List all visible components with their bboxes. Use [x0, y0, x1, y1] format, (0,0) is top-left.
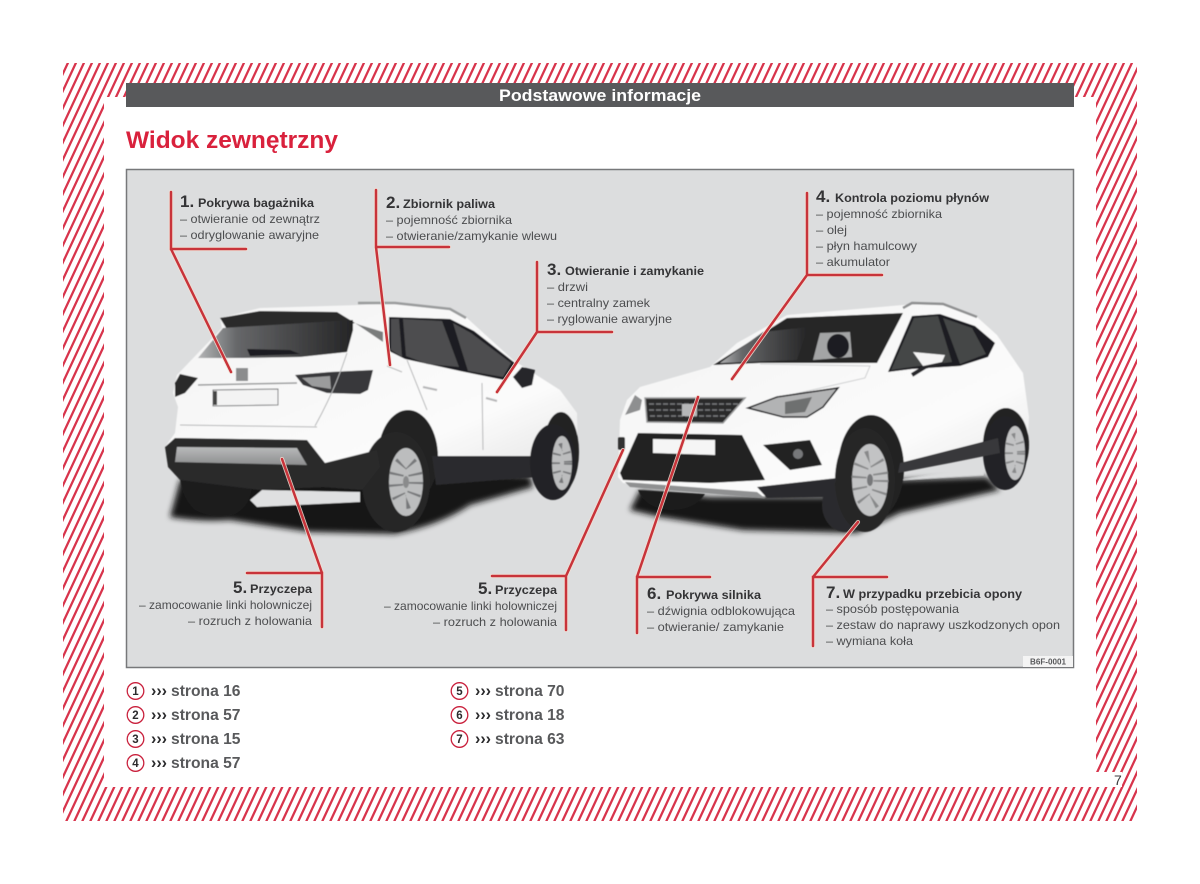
callout 5 rear: – rozruch z holowania [188, 614, 312, 628]
reference 2 [127, 705, 240, 724]
right tail lamp [295, 370, 373, 394]
reference 7: ››› [475, 729, 491, 748]
section bar: Podstawowe informacje [499, 86, 701, 105]
reference 1: ››› [151, 681, 167, 700]
front wheel front car [822, 428, 895, 532]
reference 5 [451, 681, 564, 700]
side sill [898, 438, 1000, 473]
callout 4: – olej [816, 223, 847, 237]
callout 3 [497, 260, 704, 392]
callout 3: Otwieranie i zamykanie [565, 264, 704, 278]
side windows [391, 319, 511, 377]
callout 7: W przypadku przebicia opony [843, 587, 1022, 601]
skid plate [625, 482, 765, 498]
figure code [1023, 656, 1073, 667]
callout 6: 6. [647, 584, 661, 603]
leader 6 [637, 397, 710, 633]
reference 4 [127, 753, 240, 772]
callout 5 rear: 5. [233, 578, 247, 597]
callout 5 front: Przyczepa [495, 583, 557, 597]
reference 3: strona 15 [171, 731, 241, 748]
page references column 1 [127, 681, 241, 772]
callout 4: – akumulator [816, 255, 890, 269]
rear wheel rear car [362, 432, 430, 532]
callout 4: – pojemność zbiornika [816, 207, 942, 221]
roof rail [903, 303, 977, 317]
side marker [625, 395, 642, 415]
number plate [213, 389, 278, 406]
callout 7: – sposób postępowania [826, 602, 959, 616]
side glass frame [888, 314, 995, 372]
reference 2: 2 [132, 710, 139, 722]
interior [813, 332, 852, 360]
reference 2: ››› [151, 705, 167, 724]
panel: exterior view [126, 170, 1074, 668]
reference 7 [451, 729, 565, 748]
mirror [513, 367, 535, 388]
callout 4 [732, 187, 990, 379]
headlamp [748, 388, 838, 417]
callout 3: – ryglowanie awaryjne [547, 312, 672, 326]
reference 6: 6 [456, 710, 463, 722]
callout 1: – odryglowanie awaryjne [180, 228, 319, 242]
callout 3: 3. [547, 260, 561, 279]
reference 5: ››› [475, 681, 491, 700]
reference 3 [127, 729, 241, 748]
hood lines [760, 364, 870, 395]
figure code: B6F-0001 [1030, 658, 1067, 666]
callout 6 [637, 397, 795, 634]
wheel arches [378, 410, 579, 504]
mirror [912, 352, 945, 375]
side glass frame [389, 317, 515, 380]
callout 7 [813, 522, 1060, 648]
reference 3: 3 [132, 734, 139, 746]
reference 4: 4 [132, 758, 139, 770]
reference 4: ››› [151, 753, 167, 772]
ground shadow rear car [170, 470, 533, 534]
callout 2: – pojemność zbiornika [386, 213, 512, 227]
callout 1: 1. [180, 192, 194, 211]
callout 7: – wymiana koła [826, 634, 913, 648]
callout 7: – zestaw do naprawy uszkodzonych opon [826, 618, 1060, 632]
callout 5 front: – zamocowanie linki holowniczej [384, 599, 557, 613]
callout 5 rear: Przyczepa [250, 582, 312, 596]
section bar [126, 83, 1074, 107]
callout 6: – otwieranie/ zamykanie [647, 620, 784, 634]
reference 1: strona 16 [171, 683, 241, 700]
side windows [891, 316, 986, 370]
callout 2 [376, 190, 557, 365]
leader 5 rear [247, 459, 322, 627]
number plate [653, 439, 715, 455]
leader 7 [813, 522, 887, 646]
bumper [165, 438, 380, 490]
callout 2: – otwieranie/zamykanie wlewu [386, 229, 557, 243]
callout 5 rear: – zamocowanie linki holowniczej [139, 598, 312, 612]
body shell [165, 303, 578, 480]
title: Widok zewnętrzny [126, 127, 339, 154]
rear window [198, 320, 353, 358]
callout 6: Pokrywa silnika [666, 588, 761, 602]
reference 6: strona 18 [495, 707, 565, 724]
windshield [713, 313, 903, 365]
page references column 2 [451, 681, 565, 748]
leader 3 [497, 262, 612, 392]
callout 6: – dźwignia odblokowująca [647, 604, 795, 618]
leader 2 [376, 190, 449, 365]
callout 3: – drzwi [547, 280, 588, 294]
callout 5 front: – rozruch z holowania [433, 615, 557, 629]
leader 4 [732, 193, 882, 379]
wheel arches [838, 408, 1029, 521]
reference 3: ››› [151, 729, 167, 748]
ground shadow front car [630, 477, 1000, 533]
front wheel rear car [530, 424, 576, 500]
wiper [247, 349, 300, 356]
leader 5 front [492, 450, 623, 630]
reference 4: strona 57 [171, 755, 240, 772]
bumper silver panel [175, 447, 307, 465]
fog lamp right [763, 440, 822, 470]
lower intake [620, 433, 765, 483]
windshield reflection [720, 327, 808, 363]
reference 6 [451, 705, 565, 724]
roof rail [358, 303, 466, 318]
leader 1 [171, 192, 246, 372]
fog lamp left [618, 437, 625, 450]
reference 5: strona 70 [495, 683, 564, 700]
callout 4: – płyn hamulcowy [816, 239, 917, 253]
badge [236, 368, 248, 381]
reference 1 [127, 681, 241, 700]
grille [645, 398, 745, 423]
body shell [618, 303, 1029, 497]
hatched page border [63, 63, 1137, 821]
reference 1: 1 [132, 686, 139, 698]
front car illustration [618, 303, 1029, 533]
callout 1: – otwieranie od zewnątrz [180, 212, 320, 226]
rear car illustration [165, 303, 579, 534]
callout 7: 7. [826, 583, 840, 602]
callout 1 [171, 192, 320, 372]
far wheel [638, 490, 705, 510]
callout 5 front [384, 450, 623, 630]
callout 4: 4. [816, 187, 830, 206]
callout 3: – centralny zamek [547, 296, 651, 310]
spoiler [220, 311, 355, 331]
reference 7: strona 63 [495, 731, 565, 748]
lit ground patch [250, 490, 360, 507]
reference 6: ››› [475, 705, 491, 724]
reference 7: 7 [456, 734, 463, 746]
callout 2: 2. [386, 193, 400, 212]
page number: 7 [1114, 772, 1122, 788]
callout 5 front: 5. [478, 579, 492, 598]
chin spoiler [757, 478, 837, 498]
callout 1: Pokrywa bagażnika [198, 196, 314, 210]
far rear wheel [180, 478, 252, 516]
callout 4: Kontrola poziomu płynów [835, 191, 990, 205]
body lines [180, 353, 497, 450]
left tail lamp [175, 374, 198, 397]
side sill [432, 456, 547, 485]
reference 2: strona 57 [171, 707, 240, 724]
callout 5 rear [139, 459, 322, 628]
reference 5: 5 [456, 686, 463, 698]
lit ground patch [900, 467, 983, 480]
headrest [827, 334, 849, 358]
rear wheel front car [983, 416, 1027, 490]
callout 2: Zbiornik paliwa [403, 197, 495, 211]
pillar strip [355, 323, 383, 342]
